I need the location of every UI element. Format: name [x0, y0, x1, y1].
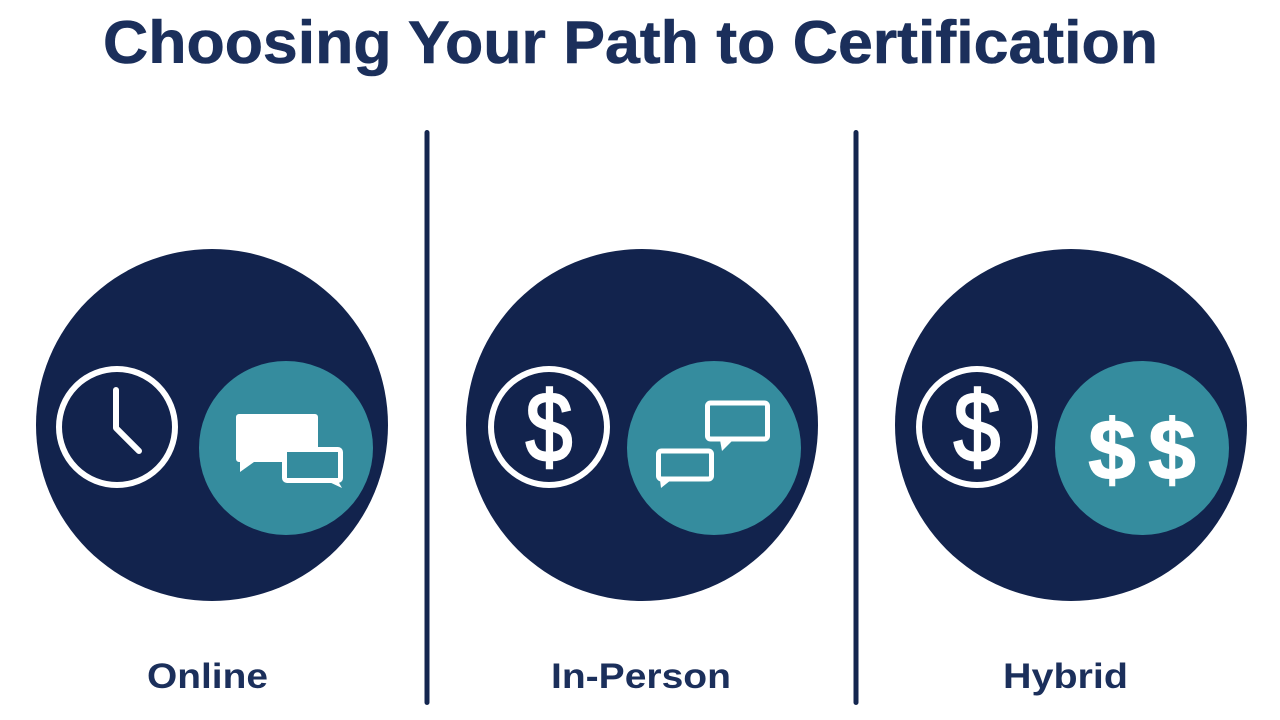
- label: online: Online: [147, 657, 268, 696]
- icon: conversation bubbles: [658, 403, 768, 488]
- icon: two dollar signs: $: [1088, 403, 1136, 498]
- in-person background circle: [466, 249, 818, 601]
- label: hybrid: Hybrid: [1003, 657, 1128, 696]
- icon: chat bubbles: [236, 414, 342, 488]
- panel: online: [36, 249, 388, 696]
- icon: dollar coin: $: [526, 373, 572, 483]
- hybrid background circle: [895, 249, 1247, 601]
- label: in-person: In-Person: [551, 657, 731, 696]
- online background circle: [36, 249, 388, 601]
- panel: in-person: [466, 249, 818, 696]
- panel: hybrid: [895, 249, 1247, 696]
- online teal circle: [199, 361, 373, 535]
- in-person teal circle: [627, 361, 801, 535]
- hybrid teal circle: [1055, 361, 1229, 535]
- icon: clock: [59, 369, 175, 485]
- icon: dollar coin: $: [954, 373, 1000, 483]
- icon: dollar coin: [919, 369, 1035, 485]
- icon: two dollar signs: [1088, 403, 1196, 498]
- icon: two dollar signs: $: [1148, 403, 1196, 498]
- icon: dollar coin: [491, 369, 607, 485]
- title: Choosing Your Path to Certification: [103, 9, 1158, 76]
